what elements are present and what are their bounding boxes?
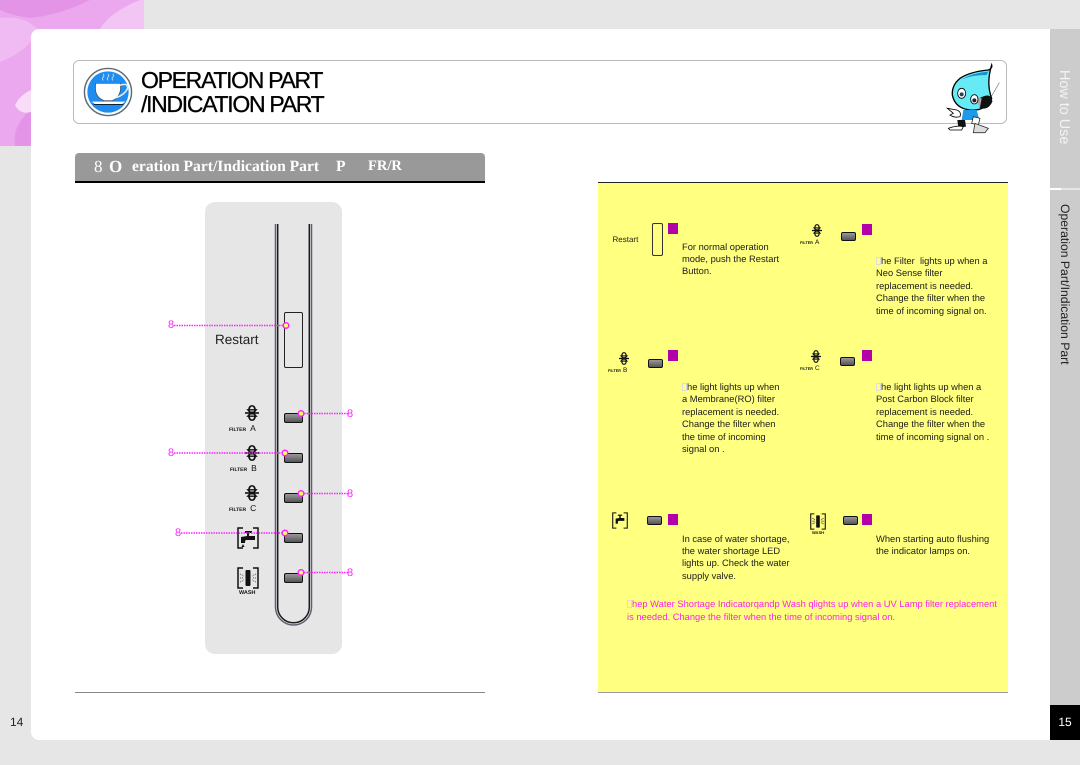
LED water <box>284 533 303 543</box>
restart icon button <box>652 223 663 256</box>
callout number marker: 8 <box>347 408 353 420</box>
callout lines and markers <box>174 322 348 576</box>
section heading bar: FR/R <box>368 158 402 174</box>
text: filter B: Change the filter when <box>682 419 776 429</box>
text: wash: When starting auto flushing <box>876 534 989 544</box>
label: wash small: WASH <box>812 530 824 535</box>
text: filter C: Change the filter when the <box>876 419 985 429</box>
sidebar tab: Operation Part/Indication Part <box>1050 190 1080 705</box>
text: filter C <box>876 382 989 442</box>
label: filter A small: FILTER A <box>800 239 819 246</box>
LED small wash <box>843 516 858 525</box>
text: restart: For normal operation <box>682 242 769 252</box>
LED A <box>284 413 303 423</box>
text: filter A: Change the filter when the <box>876 293 985 303</box>
marker square <box>862 350 872 360</box>
restart button <box>284 312 303 368</box>
marker square <box>862 514 872 524</box>
restart label: Restart <box>215 332 259 347</box>
label: FILTER C: FILTER C <box>229 503 256 513</box>
text: magenta note: is needed. Change the filter when the time of incoming signal on. <box>627 612 895 622</box>
LED small B <box>648 359 663 368</box>
title text <box>140 67 324 117</box>
page number 15 <box>1050 705 1080 740</box>
text: water shortage: lights up. Check the water <box>682 558 790 568</box>
LED small water <box>647 516 662 525</box>
text: filter C: time of incoming signal on . <box>876 432 989 442</box>
icon: filter B small <box>619 352 629 365</box>
text: filter B: he light lights up when <box>687 382 779 392</box>
text: filter B: signal on . <box>682 444 725 454</box>
label: FILTER B: FILTER B <box>230 463 257 473</box>
icon: wash small <box>810 513 826 530</box>
section heading bar: P <box>336 158 346 175</box>
text: magenta note <box>627 599 997 622</box>
section heading bar <box>75 153 485 183</box>
icon: tap small <box>612 512 628 529</box>
text: filter A: time of incoming signal on. <box>876 306 987 316</box>
text: water shortage: In case of water shortage, <box>682 534 790 544</box>
icon: water tap <box>237 527 259 549</box>
icon: water drop mascot <box>946 62 1000 134</box>
section heading bar: eration Part/Indication Part <box>132 158 319 175</box>
callout number marker: 8 <box>347 488 353 500</box>
label: filter C small: FILTER C <box>800 365 820 372</box>
text: filter C: Post Carbon Block filter <box>876 394 974 404</box>
text: restart: mode, push the Restart <box>682 254 779 264</box>
text: filter B: a Membrane(RO) filter <box>682 394 775 404</box>
text: filter B: replacement is needed. <box>682 407 779 417</box>
restart icon label: Restart <box>612 235 638 244</box>
page number 14: 14 <box>10 715 23 729</box>
title box <box>73 60 1007 124</box>
text: wash <box>876 534 989 556</box>
text: restart <box>682 242 780 276</box>
marker square <box>668 350 678 360</box>
marker square <box>668 514 678 524</box>
text: wash: the indicator lamps on. <box>876 546 970 556</box>
bottom rule left <box>75 692 485 693</box>
text: restart: Button. <box>682 266 712 276</box>
callout number marker: 8 <box>168 447 174 459</box>
text: water shortage: the water shortage LED <box>682 546 780 556</box>
LED C <box>284 493 303 503</box>
title text: /INDICATION PART <box>141 91 323 117</box>
text: filter A: Neo Sense filter <box>876 268 942 278</box>
label: filter B small: FILTER B <box>608 367 627 374</box>
icon: filter A small <box>812 224 822 237</box>
sidebar tab: How to Use <box>1050 29 1080 188</box>
callout number marker: 8 <box>175 527 181 539</box>
text: filter A: replacement is needed. <box>876 281 973 291</box>
text: filter B: the time of incoming <box>682 432 766 442</box>
panel: yellow descriptions <box>598 182 1008 693</box>
callout number marker: 8 <box>168 319 174 331</box>
LED wash <box>284 573 303 583</box>
text: filter A <box>876 256 988 316</box>
text: filter C: replacement is needed. <box>876 407 973 417</box>
marker square <box>668 223 678 234</box>
icon: coffee cup <box>84 68 132 116</box>
text: filter C: he light lights up when a <box>881 382 981 392</box>
slot channel outline <box>274 224 312 626</box>
icon: filter C <box>245 485 259 501</box>
text: filter B <box>682 382 779 454</box>
callout number marker: 8 <box>347 567 353 579</box>
section heading bar: 8 <box>94 157 102 176</box>
panel: control panel diagram <box>205 202 342 654</box>
icon: filter B <box>245 445 259 461</box>
text: water shortage: supply valve. <box>682 571 736 581</box>
section heading bar: O <box>109 157 122 176</box>
pink decorative corner <box>0 0 144 146</box>
text: filter A: he Filter lights up when a <box>881 256 987 266</box>
sidebar tab: How to Use: How to Use <box>1056 70 1072 144</box>
LED small A <box>841 232 856 241</box>
sidebar tab: Operation Part/Indication Part: Operation Part/Indication Part <box>1058 204 1072 365</box>
text: magenta note: hep Water Shortage Indicatorqandp Wash qlights up when a UV Lamp filter replacement <box>632 599 997 609</box>
page number 15: 15 <box>1058 715 1072 729</box>
icon: wash <box>237 567 259 589</box>
label: WASH: WASH <box>239 590 256 596</box>
LED small C <box>840 357 855 366</box>
LED B <box>284 453 303 463</box>
icon: filter C small <box>811 350 821 363</box>
title text: OPERATION PART <box>141 67 322 93</box>
label: FILTER A: FILTER A <box>229 423 256 433</box>
icon: filter A <box>245 405 259 421</box>
text: water shortage <box>682 534 790 581</box>
marker square <box>862 224 872 234</box>
